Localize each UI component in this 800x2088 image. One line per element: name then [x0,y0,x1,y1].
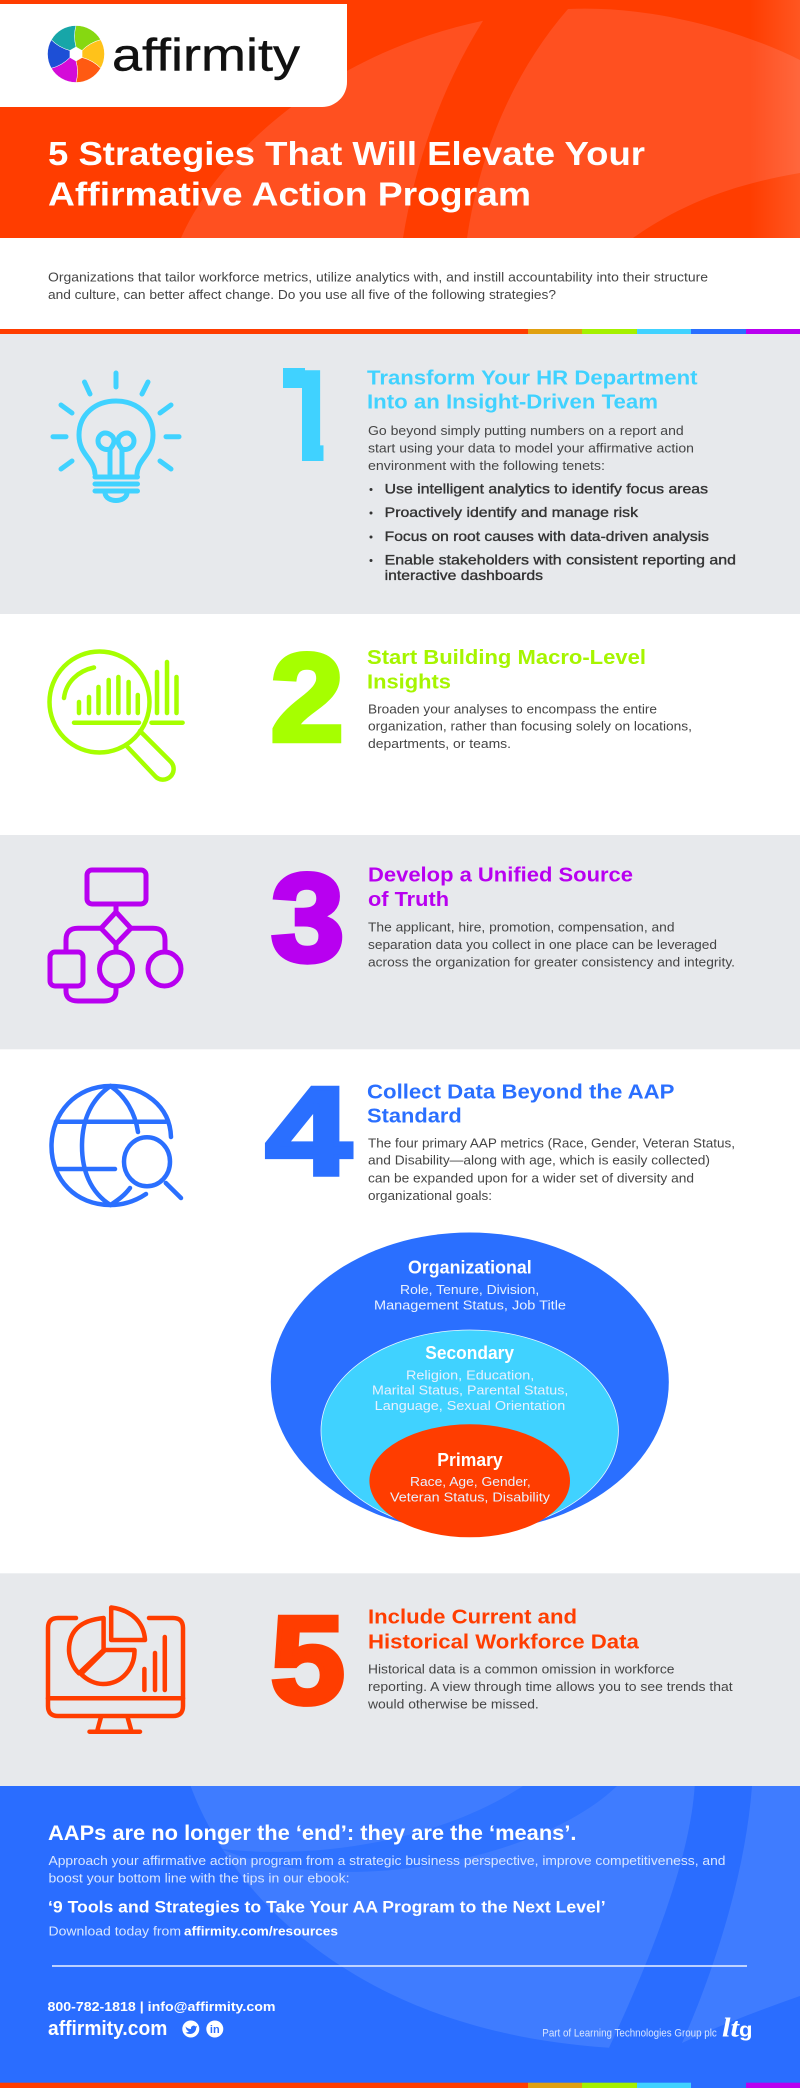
title [48,135,645,213]
ltg attribution: lt [722,2013,741,2043]
icon: linkedin [206,2020,223,2038]
bullet list: Focus on root causes with data-driven analysis [385,528,709,544]
body text 3: across the organization for greater consistency and integrity. [368,955,735,970]
logo panel [0,4,347,107]
body text 4 [368,1135,735,1203]
bullet list: Enable stakeholders with consistent reporting and [385,551,736,567]
number 4: 4 [266,1062,351,1201]
website: affirmity.com [48,2018,167,2040]
intro paragraph: Organizations that tailor workforce metrics, utilize analytics with, and instill accountability into their structure [48,270,708,285]
panel: strategy 4 [52,1062,735,1537]
title: 5 Strategies That Will Elevate Your [48,135,645,172]
body text 2: departments, or teams. [368,736,511,751]
body text 5 [367,1661,733,1711]
body text 4: can be expanded upon for a wider set of diversity and [368,1170,694,1185]
panel: strategy 1 [0,334,800,614]
ltg attribution [542,2013,752,2043]
heading 3 [368,864,633,911]
icon: globe with magnifier [52,1086,181,1205]
body text 4: The four primary AAP metrics (Race, Gender, Veteran Status, [368,1135,735,1150]
body text 5: Historical data is a common omission in workforce [368,1661,674,1676]
icon: light bulb [53,373,179,500]
intro paragraph: and culture, can better affect change. Do you use all five of the following strategies? [48,287,556,302]
heading 5: Include Current and [368,1605,577,1628]
number 2: 2 [270,629,344,768]
heading 2 [367,646,646,693]
body text 4: and Disability—along with age, which is easily collected) [368,1153,710,1168]
bottom rainbow strip [0,2083,800,2088]
panel: strategy 2 [50,629,692,780]
footer body text: Approach your affirmative action program from a strategic business perspective, improve competitiveness, and [48,1853,726,1868]
bullet list: Proactively identify and manage risk [385,504,639,520]
body text 1: environment with the following tenets: [368,458,605,473]
number 5: 5 [270,1591,345,1730]
heading 5: Historical Workforce Data [368,1630,639,1653]
ellipse: organizational: Role, Tenure, Division, [400,1282,539,1297]
header banner [0,0,800,238]
number 1 [283,368,324,461]
ellipse: primary: Primary [437,1450,503,1470]
download call to action: affirmity.com/resources [184,1924,338,1939]
heading 2: Start Building Macro-Level [367,646,646,669]
ltg attribution: Part of Learning Technologies Group plc [542,2028,717,2040]
ellipse: organizational: Management Status, Job Title [374,1297,566,1312]
title: Affirmative Action Program [48,176,531,213]
body text 4: organizational goals: [368,1188,492,1203]
ellipse: organizational [271,1232,669,1532]
heading 4: Collect Data Beyond the AAP [367,1080,674,1103]
body text 1: start using your data to model your affirmative action [368,440,694,455]
body text 1 [368,423,694,473]
body text 2: Broaden your analyses to encompass the entire [368,701,657,716]
icon: monitor with charts [48,1608,183,1732]
icon: twitter [182,2020,199,2038]
ellipse: secondary: Language, Sexual Orientation [375,1398,565,1413]
heading 1: Into an Insight-Driven Team [367,390,658,413]
icon: affirmity aperture logo [39,18,113,90]
contact details: 800-782-1818 | info@affirmity.com [48,1999,276,2014]
bullet list [370,480,736,583]
ellipse: secondary: Religion, Education, [406,1367,534,1382]
body text 3 [368,920,735,970]
body text 5: reporting. A view through time allows you to see trends that [368,1679,733,1694]
icon: flow chart [50,870,181,1001]
body text 1: Go beyond simply putting numbers on a report and [368,423,684,438]
rainbow divider [0,329,800,334]
bullet list: Use intelligent analytics to identify focus areas [385,480,708,496]
bullet list: interactive dashboards [385,567,543,583]
ellipse: secondary: Marital Status, Parental Status, [372,1383,568,1398]
heading 2: Insights [367,670,451,693]
ellipse: organizational: Organizational [408,1257,532,1277]
ebook title: ‘9 Tools and Strategies to Take Your AA Program to the Next Level’ [48,1899,606,1917]
body text 5: would otherwise be missed. [367,1696,539,1711]
panel: strategy 3 [0,835,800,1049]
body text 3: separation data you collect in one place can be leveraged [368,937,717,952]
body text 3: The applicant, hire, promotion, compensation, and [368,920,674,935]
nested ellipse diagram [271,1232,669,1537]
icon: magnifier over bar chart [50,652,183,780]
heading 1 [367,366,698,413]
number 1: 1 [271,346,341,489]
download call to action [48,1924,338,1939]
ellipse: primary [369,1424,570,1537]
ellipse: secondary: Secondary [425,1343,514,1363]
intro paragraph [48,270,708,302]
footer headline: AAPs are no longer the ‘end’: they are the ‘means’. [48,1822,576,1845]
ellipse: primary: Race, Age, Gender, [410,1474,531,1489]
heading 4: Standard [367,1105,462,1128]
heading 4 [367,1080,674,1128]
logo wordmark: affirmity [112,30,301,80]
ellipse: primary: Veteran Status, Disability [390,1490,551,1505]
download call to action: Download today from [48,1924,181,1939]
body text 2: organization, rather than focusing solely on locations, [368,719,692,734]
footer panel [0,1786,800,2088]
body text 2 [368,701,692,751]
icon: linkedin: in [210,2024,220,2036]
ellipse: secondary [321,1330,618,1532]
panel: strategy 5 [0,1573,800,1786]
heading 5 [368,1605,639,1653]
footer body text [48,1853,726,1886]
heading 3: of Truth [368,888,449,911]
heading 3: Develop a Unified Source [368,864,633,887]
number 3: 3 [271,849,344,988]
ltg attribution: g [739,2020,752,2042]
heading 1: Transform Your HR Department [367,366,698,389]
footer body text: boost your bottom line with the tips in our ebook: [48,1871,350,1886]
